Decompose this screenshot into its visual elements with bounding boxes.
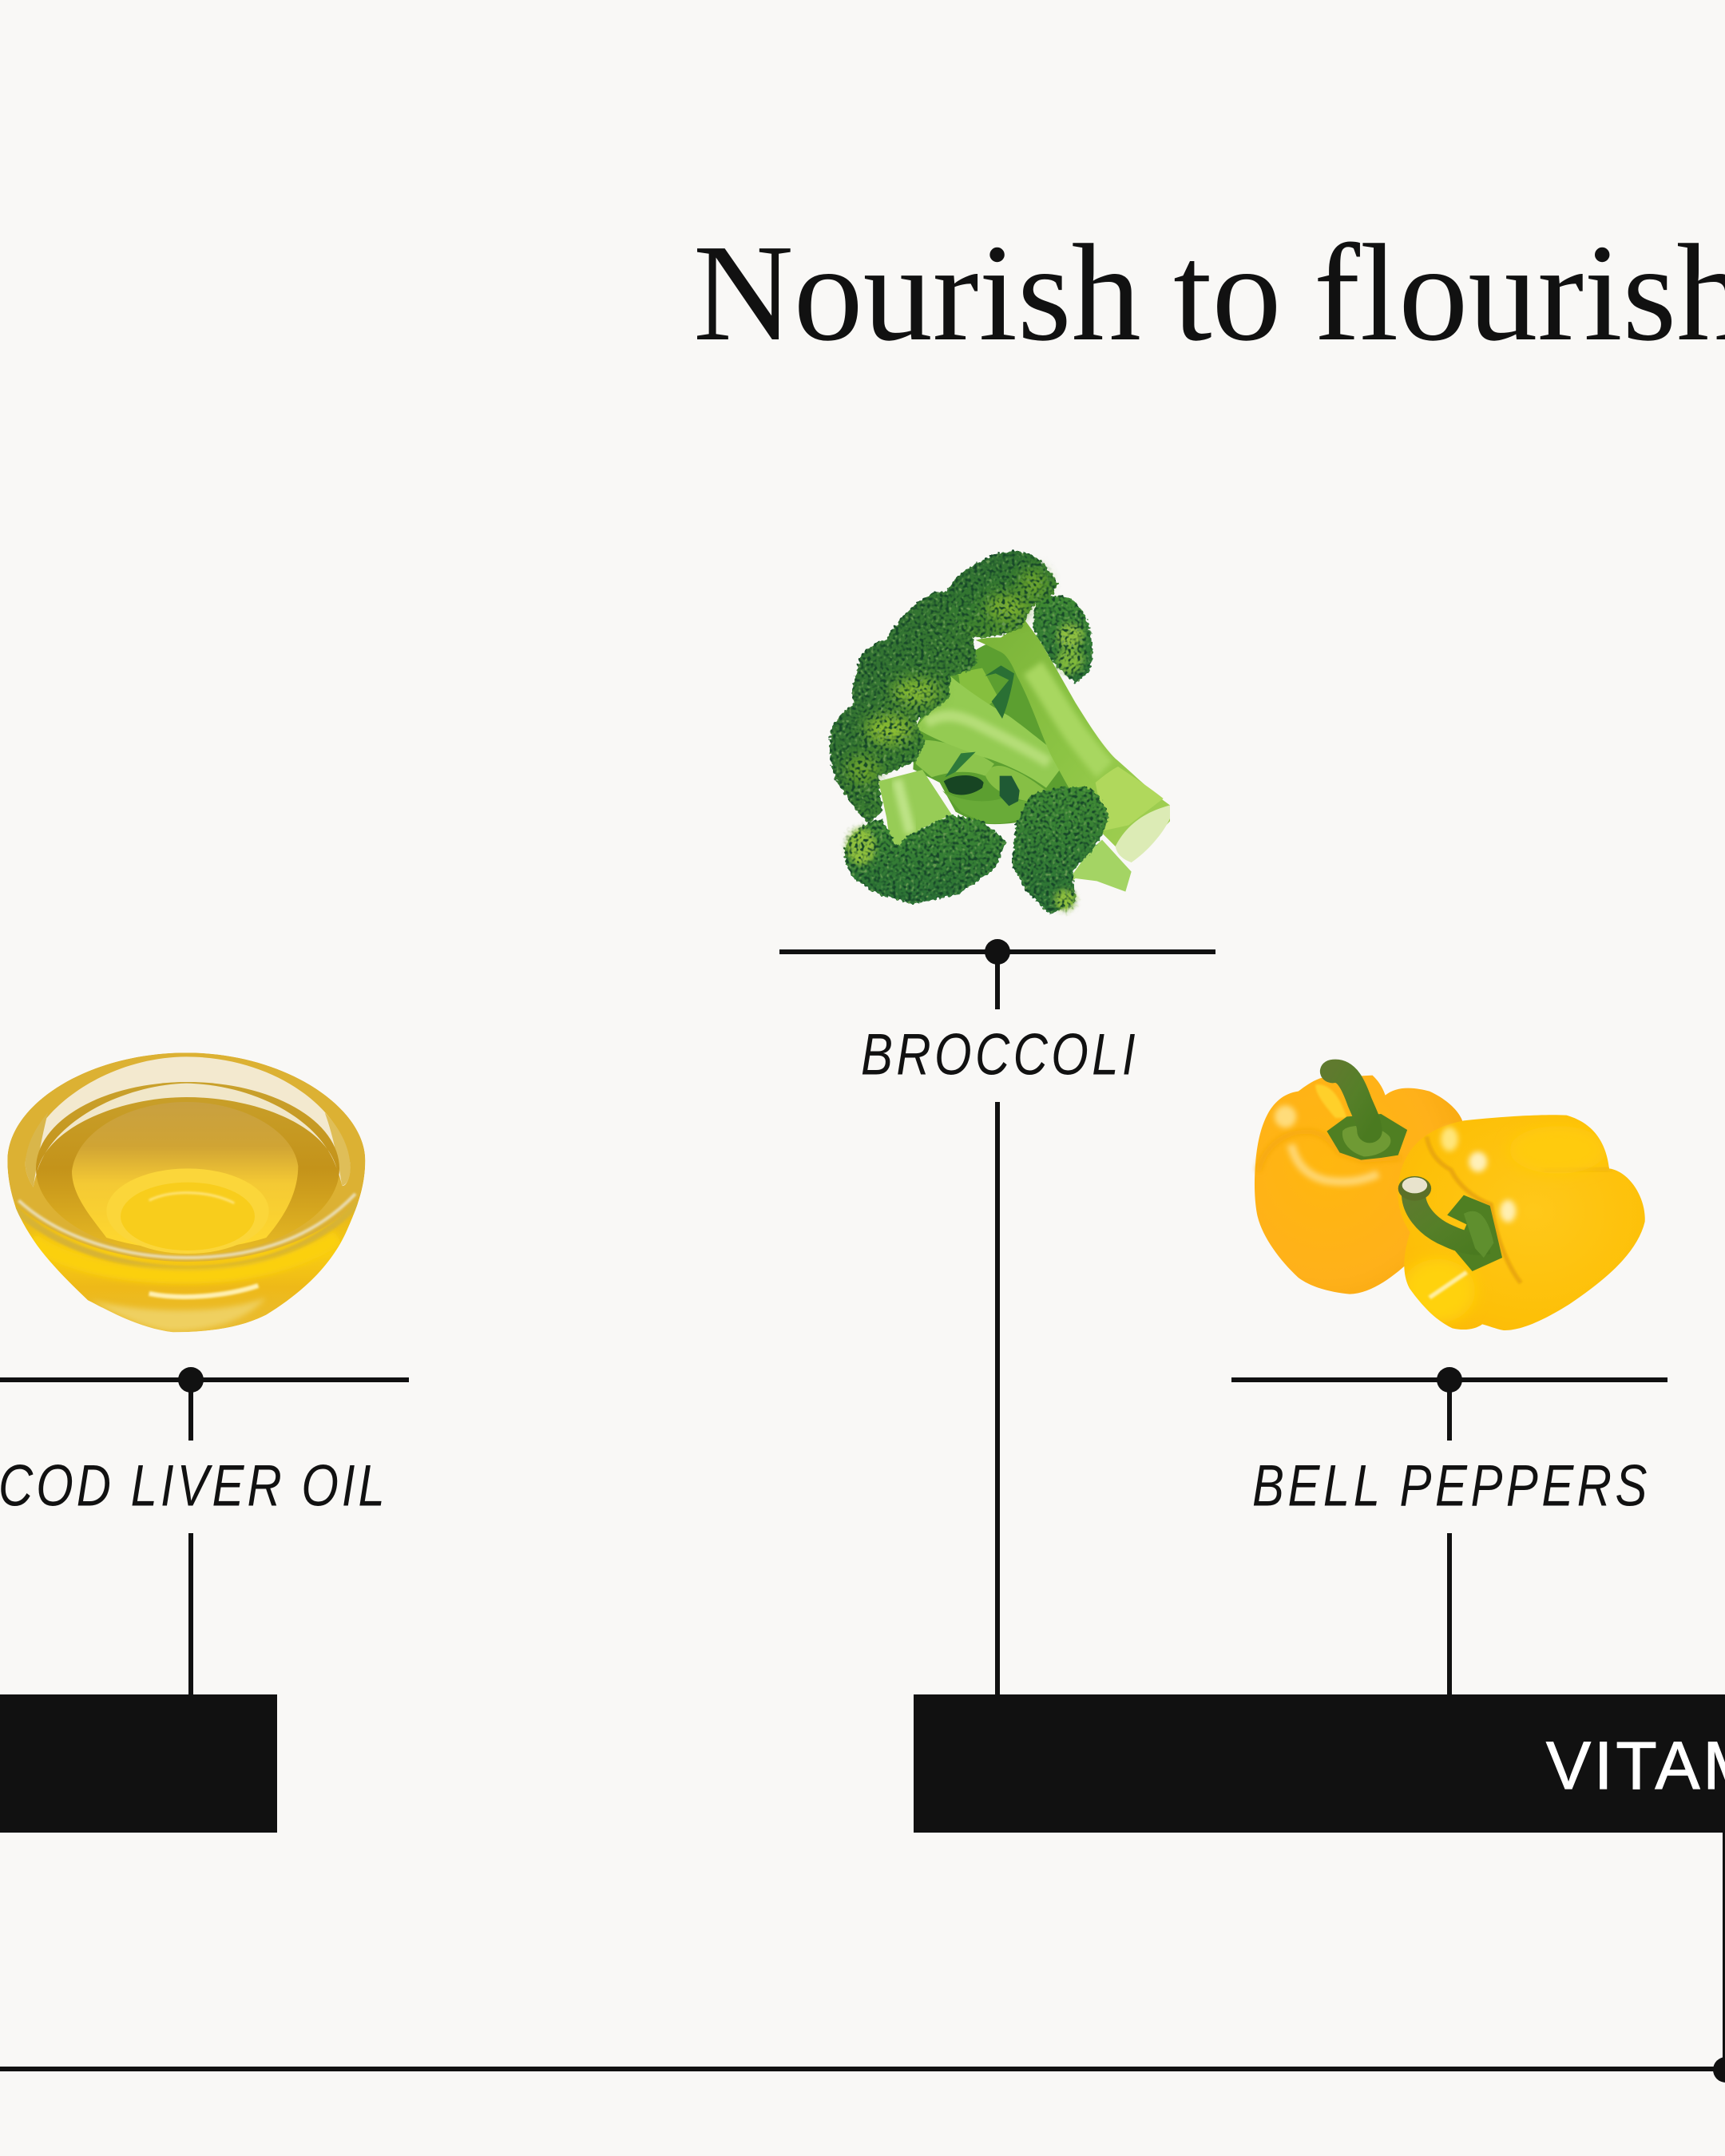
soft shading clipped to pepper bbox=[1401, 1126, 1611, 1323]
horizontal rule bbox=[779, 949, 1215, 954]
main stalk highlight bbox=[1033, 668, 1104, 769]
stub to label bbox=[188, 1380, 193, 1441]
connector group: broccoli bbox=[779, 939, 1215, 1696]
highlights bbox=[1469, 1151, 1487, 1172]
bottom connector bbox=[0, 1833, 1725, 2083]
line to vitamin bar bbox=[1447, 1533, 1452, 1696]
icon: yellow bell peppers bbox=[1255, 1071, 1645, 1330]
line to left bar bbox=[188, 1533, 193, 1696]
top floret bbox=[944, 551, 1057, 637]
highlights bbox=[1291, 1144, 1378, 1182]
connector group: bell peppers bbox=[1231, 1367, 1668, 1696]
bottom left floret bbox=[844, 814, 1006, 904]
lower glass reflections bbox=[90, 1298, 266, 1331]
back right floret bbox=[1033, 596, 1092, 683]
vertical drop from vitamin bar bbox=[1723, 1833, 1725, 2070]
cut stem tip bbox=[1398, 1176, 1431, 1201]
bottom right stem bbox=[1062, 840, 1132, 892]
label: bell peppers: BELL PEPPERS bbox=[1252, 1454, 1647, 1519]
right pepper bbox=[1398, 1115, 1645, 1330]
title: Nourish to flourish bbox=[693, 216, 1725, 370]
stem bbox=[1333, 1071, 1370, 1132]
calyx bbox=[1326, 1114, 1407, 1160]
oil surface bbox=[36, 1082, 339, 1255]
calyx bbox=[1447, 1195, 1502, 1271]
left lower stalk bbox=[916, 740, 994, 777]
left black bar bbox=[0, 1694, 277, 1833]
junction dot bbox=[1713, 2057, 1725, 2083]
lobe crease lines bbox=[1426, 1136, 1521, 1283]
bright front band bbox=[32, 1238, 338, 1276]
rim glass gold edge bbox=[7, 1052, 365, 1262]
lower lobe crease bbox=[1259, 1132, 1401, 1171]
stem bbox=[1414, 1188, 1488, 1244]
dark leaves bbox=[985, 665, 1014, 719]
base of main stem bbox=[1096, 767, 1164, 830]
clear rim band bbox=[26, 1056, 351, 1187]
horizontal rule bbox=[0, 1377, 409, 1382]
label: broccoli: BROCCOLI bbox=[861, 1023, 1136, 1088]
upper middle stalk bbox=[958, 668, 998, 708]
icon: broccoli bbox=[830, 551, 1170, 914]
inner foot ring bbox=[106, 1168, 269, 1254]
lower stalk bbox=[942, 791, 1028, 824]
big middle stalk bbox=[916, 676, 1062, 788]
stub to label bbox=[995, 952, 1000, 1009]
bottom right floret bbox=[1012, 787, 1108, 914]
glass bowl body bbox=[7, 1052, 365, 1332]
main right stalk bbox=[976, 620, 1170, 862]
back stalk tube bbox=[985, 766, 1046, 801]
cut end of stalk bbox=[1116, 805, 1170, 862]
left pepper bbox=[1255, 1071, 1462, 1294]
stalk backing bbox=[913, 639, 1094, 824]
icon: cod liver oil bowl bbox=[7, 1052, 365, 1332]
horizontal rule bbox=[1231, 1377, 1668, 1382]
node dot bbox=[1437, 1367, 1462, 1393]
front rim lines bbox=[18, 1194, 355, 1258]
label: cod liver oil: COD LIVER OIL bbox=[0, 1454, 385, 1519]
stub to label bbox=[1447, 1380, 1452, 1441]
horizontal bottom rule bbox=[0, 2067, 1725, 2071]
connector group: cod liver oil bbox=[0, 1367, 409, 1696]
inner bowl floor bbox=[72, 1102, 298, 1250]
vitamin black bar bbox=[914, 1694, 1725, 1833]
line to vitamin bar bbox=[995, 1102, 1000, 1696]
bottom left stem bbox=[865, 770, 952, 862]
node dot bbox=[178, 1367, 204, 1393]
big left floret bbox=[830, 591, 978, 822]
node dot bbox=[985, 939, 1010, 965]
